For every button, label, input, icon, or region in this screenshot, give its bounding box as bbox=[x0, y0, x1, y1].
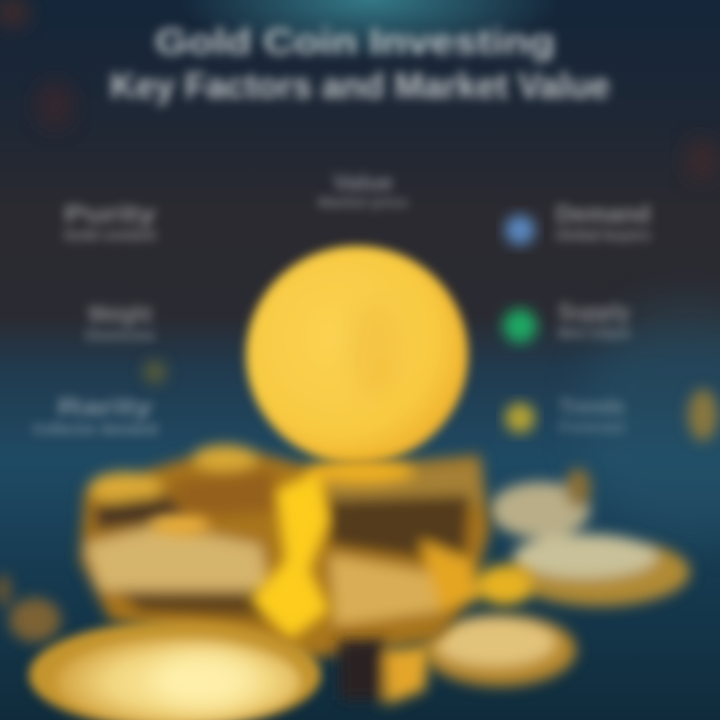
label: left middle: Ounces bbox=[85, 327, 155, 344]
coins: right side bbox=[424, 468, 690, 686]
pile of gold bars and coins bbox=[0, 445, 690, 720]
label: right middle with green icon: Mint output bbox=[558, 325, 630, 342]
label: right middle with green icon: Supply bbox=[558, 299, 631, 326]
label: left middle bbox=[85, 301, 155, 344]
label: left lower: Rarity bbox=[58, 394, 153, 421]
label: right lower with yellow icon: Forecast bbox=[559, 419, 625, 436]
label: right upper with blue icon: Demand bbox=[556, 201, 650, 228]
bright gold drip bbox=[150, 460, 415, 640]
label: right middle with green icon bbox=[503, 299, 631, 343]
icon: blue marker bbox=[505, 215, 535, 245]
coin: far left bbox=[0, 574, 61, 642]
label: left upper: Purity bbox=[64, 201, 157, 228]
label: left upper: Gold content bbox=[64, 227, 156, 244]
gold bar: bottom centre bbox=[338, 640, 430, 705]
title bbox=[110, 21, 610, 106]
icon: green marker bbox=[503, 309, 537, 343]
label: right upper with blue icon: Global buyers bbox=[556, 227, 650, 244]
label: right lower with yellow icon bbox=[505, 394, 625, 436]
label: right lower with yellow icon: Trends bbox=[559, 394, 625, 419]
gold bars: main stack bbox=[80, 445, 533, 660]
large gold coin bbox=[246, 246, 468, 464]
label: top centre: Value bbox=[333, 170, 393, 195]
label: left middle: Weight bbox=[88, 301, 152, 328]
label: top centre bbox=[318, 170, 408, 210]
coin: bottom left large bbox=[29, 621, 321, 720]
title: Gold Coin Investing bbox=[155, 21, 555, 62]
label: left lower: Collector demand bbox=[32, 421, 158, 438]
label: top centre: Market price bbox=[318, 194, 408, 210]
label: left upper bbox=[64, 201, 157, 244]
label: left lower bbox=[32, 394, 158, 438]
icon: yellow marker bbox=[505, 403, 535, 433]
title: Key Factors and Market Value bbox=[110, 65, 610, 106]
icon: small gold accents bbox=[143, 360, 718, 441]
label: right upper with blue icon bbox=[505, 201, 650, 245]
